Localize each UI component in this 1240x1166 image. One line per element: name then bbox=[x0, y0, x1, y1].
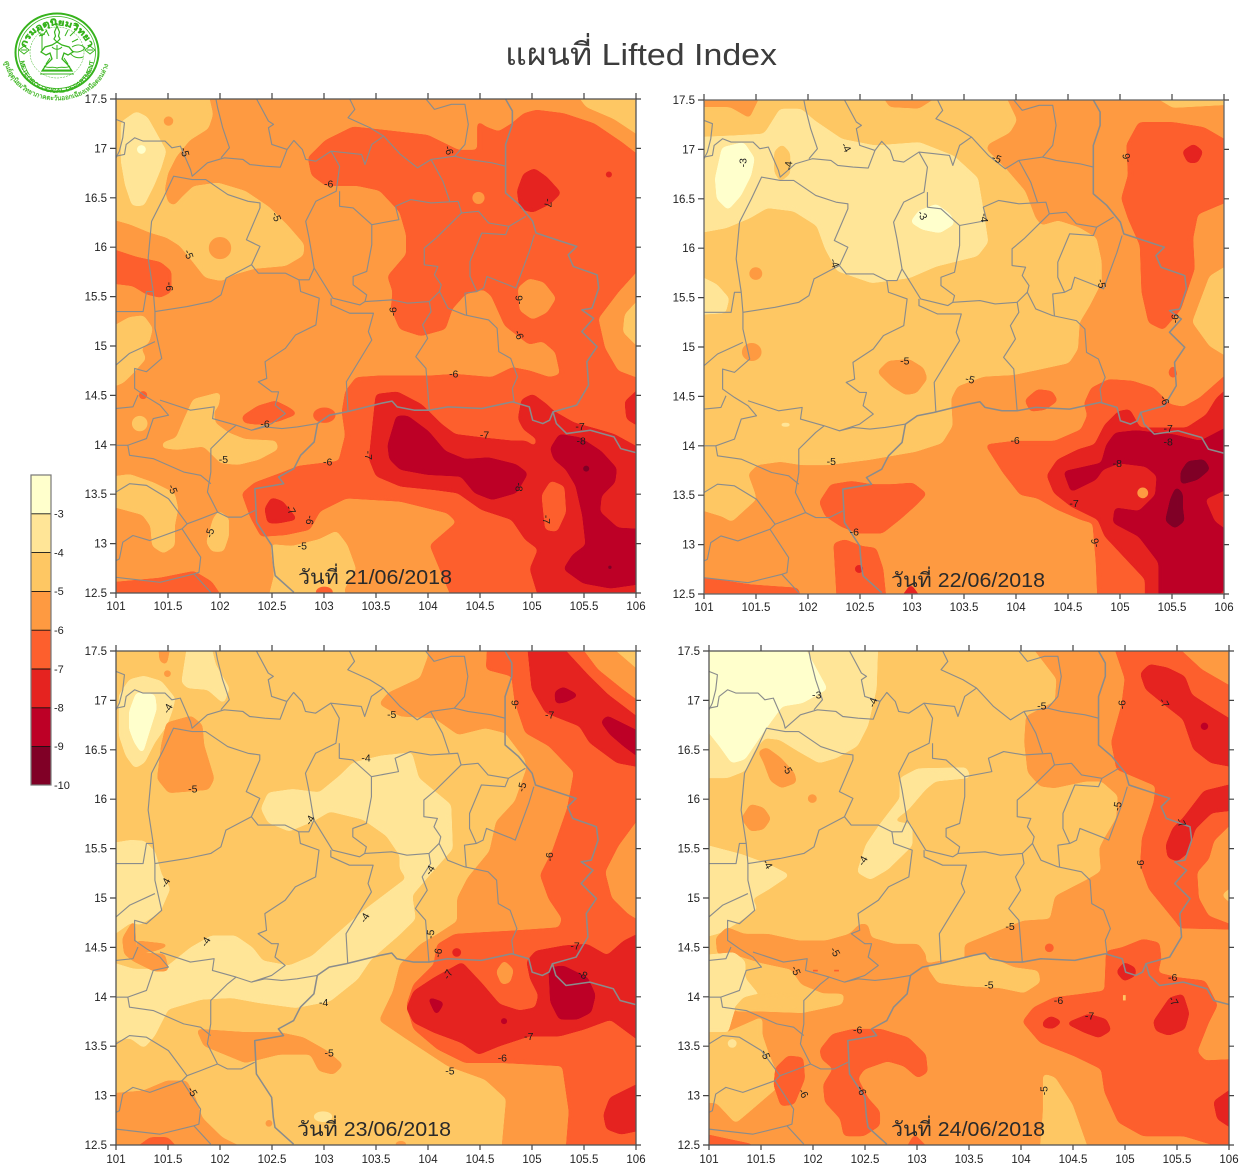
contour field 23 June: -4 bbox=[159, 876, 173, 890]
contour field 23 June: -5 bbox=[445, 1066, 455, 1077]
logo: Meteorological Department seal: METEOROLOGICAL DEPARTMENT bbox=[20, 60, 94, 93]
contour field 22 June: -4 bbox=[978, 213, 989, 223]
contour field 23 June: -5 bbox=[387, 710, 397, 721]
contour field 24 June: -6 bbox=[853, 1026, 863, 1036]
contour field 23 June: -6 bbox=[545, 852, 556, 861]
axis labels bbox=[678, 646, 1239, 1166]
colour legend: -4 bbox=[54, 547, 64, 559]
contour field 21 June: -6 bbox=[449, 370, 459, 381]
axis labels: 14 bbox=[687, 992, 701, 1004]
contour field 21 June: -8 bbox=[576, 437, 586, 448]
contour field 24 June: -7 bbox=[1085, 1012, 1094, 1022]
axis labels: 12.5 bbox=[678, 1140, 700, 1152]
axis labels: 14.5 bbox=[673, 391, 695, 403]
axis labels: 17 bbox=[687, 695, 700, 707]
axis labels: 12.5 bbox=[85, 1140, 107, 1152]
contour field 24 June: -7 bbox=[1156, 697, 1171, 710]
axis labels: 17.5 bbox=[678, 646, 700, 658]
axis labels: 101.5 bbox=[154, 1154, 182, 1166]
logo: Meteorological Department seal: ศูนย์อุตุนิยมวิทยาภาคตะวันออกเฉียงเหนือตอนล่าง bbox=[3, 61, 108, 101]
contour field 24 June: -5 bbox=[1037, 701, 1047, 712]
contour field 22 June: -5 bbox=[964, 374, 976, 387]
axis labels: 103.5 bbox=[950, 602, 978, 614]
contour field 23 June: -4 bbox=[199, 935, 214, 949]
axis labels: 13 bbox=[687, 1091, 700, 1103]
axis labels: 16.5 bbox=[673, 194, 695, 206]
contour field 24 June: -3 bbox=[812, 691, 822, 702]
axis labels: 103 bbox=[314, 1154, 334, 1166]
contour field 23 June: -8 bbox=[575, 968, 589, 982]
axis labels: 101.5 bbox=[742, 602, 770, 614]
colour legend: -5 bbox=[54, 586, 64, 598]
panel: map 21/06/2018 bbox=[85, 88, 651, 629]
axis labels: 15 bbox=[687, 893, 700, 905]
panel: map 24/06/2018 bbox=[678, 639, 1240, 1166]
axis labels: 103 bbox=[314, 601, 334, 613]
contour field 22 June: -8 bbox=[1163, 438, 1173, 448]
contour field 23 June: -7 bbox=[545, 711, 555, 722]
axis labels: 17.5 bbox=[85, 646, 107, 658]
contour field 24 June: -5 bbox=[984, 981, 994, 991]
contour field 21 June: -6 bbox=[260, 420, 270, 431]
contour field 21 June: -6 bbox=[441, 145, 455, 157]
date label: วันที่ 23/06/2018 bbox=[297, 1115, 451, 1141]
axis labels: 13.5 bbox=[85, 489, 107, 501]
colour legend: -9 bbox=[54, 741, 64, 753]
axis labels: 102.5 bbox=[851, 1154, 879, 1166]
contour field 21 June: -7 bbox=[283, 503, 297, 517]
axis labels: 16.5 bbox=[85, 745, 107, 757]
axis labels: 13 bbox=[94, 1091, 107, 1103]
contour field 21 June: -5 bbox=[219, 455, 228, 466]
contour field 22 June: -6 bbox=[1157, 394, 1171, 407]
axis labels: 103.5 bbox=[362, 601, 390, 613]
contour field 23 June: -5 bbox=[184, 1085, 199, 1099]
contour field 24 June: -4 bbox=[867, 696, 881, 709]
contour field 22 June: -4 bbox=[838, 141, 853, 155]
panel: map 22/06/2018 bbox=[673, 88, 1240, 629]
axis labels bbox=[85, 94, 646, 613]
axis labels: 106 bbox=[626, 1154, 646, 1166]
map frame and ticks bbox=[110, 93, 641, 598]
axis labels bbox=[673, 95, 1234, 614]
colour legend: -8 bbox=[54, 702, 64, 714]
colour legend: -10 bbox=[54, 780, 70, 792]
contour field 21 June: -6 bbox=[511, 329, 525, 342]
axis labels: 103.5 bbox=[362, 1154, 390, 1166]
map frame and ticks bbox=[698, 94, 1229, 599]
contour field 22 June: -3 bbox=[914, 209, 929, 222]
contour field 22 June: -6 bbox=[850, 528, 859, 539]
axis labels: 15 bbox=[94, 341, 107, 353]
axis labels: 105.5 bbox=[1163, 1154, 1191, 1166]
axis labels: 102 bbox=[803, 1154, 823, 1166]
axis labels: 13.5 bbox=[673, 490, 695, 502]
contour field 24 June: -4 bbox=[856, 854, 871, 868]
axis labels: 14.5 bbox=[85, 390, 107, 402]
contour field 24 June: -6 bbox=[1117, 700, 1128, 709]
axis labels: 101.5 bbox=[154, 601, 182, 613]
contour field 22 June: -5 bbox=[900, 356, 910, 367]
contour field 21 June bbox=[116, 100, 636, 592]
axis labels: 102 bbox=[798, 602, 818, 614]
axis labels: 17 bbox=[94, 695, 107, 707]
axis labels: 15.5 bbox=[673, 293, 695, 305]
contour field 22 June: -4 bbox=[784, 161, 795, 171]
axis labels: 102.5 bbox=[846, 602, 874, 614]
contour field 24 June: -6 bbox=[1136, 860, 1147, 869]
contour field 24 June: -6 bbox=[854, 1085, 868, 1097]
contour field 22 June: -7 bbox=[1069, 499, 1079, 510]
axis labels: 104 bbox=[1006, 602, 1026, 614]
contour field 22 June: -5 bbox=[990, 153, 1003, 166]
contour field 21 June: -7 bbox=[542, 198, 553, 208]
colour legend: -3 bbox=[54, 508, 64, 520]
contour field 23 June: -4 bbox=[358, 911, 373, 925]
contour field 23 June: -7 bbox=[524, 1032, 534, 1043]
contour field 21 June: -6 bbox=[514, 295, 526, 304]
contour field 24 June: -5 bbox=[1112, 801, 1125, 812]
contour field 21 June: -7 bbox=[540, 515, 551, 524]
axis labels: 16 bbox=[94, 794, 107, 806]
contour field 22 June: -6 bbox=[1121, 152, 1134, 163]
contour field 23 June: -4 bbox=[319, 998, 329, 1009]
axis labels: 102 bbox=[210, 601, 230, 613]
date label: วันที่ 24/06/2018 bbox=[891, 1115, 1045, 1141]
colour legend: -6 bbox=[54, 625, 64, 637]
axis labels: 17.5 bbox=[85, 94, 107, 106]
axis labels: 104 bbox=[418, 1154, 438, 1166]
contour field 24 June: -6 bbox=[1168, 973, 1178, 984]
axis labels: 105.5 bbox=[570, 1154, 598, 1166]
axis labels: 103 bbox=[902, 602, 922, 614]
axis labels: 102 bbox=[210, 1154, 230, 1166]
logo: Meteorological Department seal: กรมอุตุนิยมวิทยา bbox=[22, 18, 92, 47]
contour field 21 June: -6 bbox=[323, 457, 333, 468]
contour field 23 June: -4 bbox=[361, 753, 371, 764]
contour field 23 June: -7 bbox=[570, 942, 580, 952]
contour field 21 June: -5 bbox=[269, 211, 282, 224]
colour legend bbox=[31, 475, 70, 792]
axis labels: 14 bbox=[94, 440, 108, 452]
axis labels: 104.5 bbox=[466, 601, 494, 613]
contour field 21 June: -7 bbox=[480, 431, 489, 442]
axis labels: 15 bbox=[682, 342, 695, 354]
contour field 23 June bbox=[116, 652, 636, 1144]
axis labels: 17.5 bbox=[673, 95, 695, 107]
axis labels: 14.5 bbox=[678, 942, 700, 954]
contour field 24 June: -5 bbox=[788, 965, 802, 977]
axis labels: 103.5 bbox=[955, 1154, 983, 1166]
axis labels: 16.5 bbox=[678, 745, 700, 757]
contour field 24 June: -5 bbox=[758, 1049, 771, 1061]
contour field 21 June: -5 bbox=[177, 146, 190, 158]
axis labels: 14 bbox=[94, 992, 108, 1004]
contour field 22 June: -6 bbox=[1010, 436, 1020, 447]
contour field 21 June: -5 bbox=[181, 248, 195, 261]
contour field 24 June: -4 bbox=[760, 858, 774, 871]
axis labels: 12.5 bbox=[673, 589, 695, 601]
axis labels: 16.5 bbox=[85, 193, 107, 205]
axis labels: 16 bbox=[682, 243, 695, 255]
axis labels: 102.5 bbox=[258, 1154, 286, 1166]
contour field 22 June: -6 bbox=[1090, 537, 1103, 548]
axis labels: 15.5 bbox=[678, 844, 700, 856]
date label: วันที่ 22/06/2018 bbox=[891, 566, 1045, 592]
contour field 22 June: -8 bbox=[1113, 459, 1122, 470]
axis labels: 104 bbox=[418, 601, 438, 613]
title: แผนที่ Lifted Index bbox=[505, 33, 778, 72]
axis labels: 101 bbox=[694, 602, 714, 614]
contour field 21 June: -5 bbox=[165, 483, 179, 496]
axis labels: 14 bbox=[682, 441, 696, 453]
axis labels: 15 bbox=[94, 893, 107, 905]
axis labels: 101.5 bbox=[747, 1154, 775, 1166]
axis labels: 106 bbox=[626, 601, 646, 613]
contour field 24 June: -5 bbox=[1040, 1086, 1051, 1095]
contour field 23 June: -6 bbox=[433, 947, 445, 958]
contour field 23 June: -4 bbox=[304, 814, 318, 827]
panel: map 23/06/2018 bbox=[85, 639, 651, 1166]
axis labels: 104.5 bbox=[466, 1154, 494, 1166]
axis labels: 104.5 bbox=[1059, 1154, 1087, 1166]
contour field 24 June: -5 bbox=[1005, 922, 1015, 933]
axis labels: 105 bbox=[522, 601, 542, 613]
contour field 23 June: -6 bbox=[511, 700, 522, 709]
contour field 21 June: -6 bbox=[303, 514, 315, 526]
logo: Meteorological Department seal bbox=[3, 12, 108, 101]
axis labels: 105 bbox=[1115, 1154, 1135, 1166]
axis labels: 13.5 bbox=[85, 1041, 107, 1053]
contour field 21 June: -7 bbox=[362, 451, 373, 460]
axis labels: 105.5 bbox=[570, 601, 598, 613]
contour field 23 June: -5 bbox=[426, 929, 437, 939]
colour legend: -7 bbox=[54, 664, 64, 676]
axis labels: 16 bbox=[687, 794, 700, 806]
axis labels: 12.5 bbox=[85, 588, 107, 600]
contour field 23 June: -4 bbox=[161, 702, 176, 716]
contour field 21 June: -8 bbox=[513, 482, 524, 492]
contour field 23 June: -5 bbox=[516, 781, 530, 793]
contour field 23 June: -7 bbox=[442, 968, 456, 982]
axis labels: 105.5 bbox=[1158, 602, 1186, 614]
contour field 24 June: -7 bbox=[1165, 995, 1180, 1008]
contour field 22 June: -4 bbox=[827, 257, 841, 270]
contour field 23 June: -5 bbox=[324, 1049, 334, 1060]
axis labels: 15.5 bbox=[85, 844, 107, 856]
axis labels: 106 bbox=[1219, 1154, 1239, 1166]
contour field 21 June: -6 bbox=[388, 307, 400, 316]
axis labels: 105 bbox=[522, 1154, 542, 1166]
contour field 23 June: -5 bbox=[188, 785, 198, 796]
axis labels: 103 bbox=[907, 1154, 927, 1166]
axis labels: 13 bbox=[682, 540, 695, 552]
axis labels: 106 bbox=[1214, 602, 1234, 614]
contour field 23 June: -4 bbox=[424, 864, 438, 877]
axis labels: 16 bbox=[94, 242, 107, 254]
axis labels bbox=[85, 646, 646, 1166]
axis labels: 101 bbox=[106, 1154, 126, 1166]
axis labels: 14.5 bbox=[85, 942, 107, 954]
axis labels: 102.5 bbox=[258, 601, 286, 613]
contour field 21 June: -7 bbox=[575, 422, 585, 433]
date label: วันที่ 21/06/2018 bbox=[298, 563, 452, 589]
axis labels: 104.5 bbox=[1054, 602, 1082, 614]
axis labels: 13.5 bbox=[678, 1041, 700, 1053]
axis labels: 17 bbox=[682, 144, 695, 156]
contour field 24 June: -5 bbox=[779, 763, 794, 777]
axis labels: 101 bbox=[106, 601, 126, 613]
contour field 24 June bbox=[710, 652, 1228, 1144]
axis labels: 13 bbox=[94, 539, 107, 551]
contour field 21 June: -6 bbox=[163, 282, 174, 291]
contour field 24 June: -6 bbox=[1054, 996, 1063, 1007]
contour field 24 June: -5 bbox=[827, 946, 842, 959]
contour field 23 June: -6 bbox=[498, 1054, 507, 1065]
contour field 22 June: -7 bbox=[1163, 424, 1173, 435]
axis labels: 17 bbox=[94, 143, 107, 155]
contour field 22 June: -3 bbox=[739, 158, 750, 167]
map frame and ticks bbox=[703, 645, 1234, 1150]
contour field 24 June: -6 bbox=[795, 1087, 810, 1101]
axis labels: 15.5 bbox=[85, 292, 107, 304]
contour field 22 June bbox=[704, 100, 1224, 594]
contour field 22 June: -5 bbox=[827, 457, 836, 468]
contour field 22 June: -6 bbox=[1170, 314, 1181, 323]
contour field 21 June: -5 bbox=[298, 542, 307, 553]
axis labels: 105 bbox=[1110, 602, 1130, 614]
axis labels: 101 bbox=[699, 1154, 719, 1166]
contour field 24 June: -7 bbox=[1173, 816, 1187, 830]
contour field 22 June: -5 bbox=[1094, 278, 1107, 289]
contour field 21 June: -5 bbox=[204, 527, 217, 539]
map frame and ticks bbox=[110, 645, 641, 1150]
contour field 21 June: -6 bbox=[324, 180, 334, 191]
axis labels: 104 bbox=[1011, 1154, 1031, 1166]
